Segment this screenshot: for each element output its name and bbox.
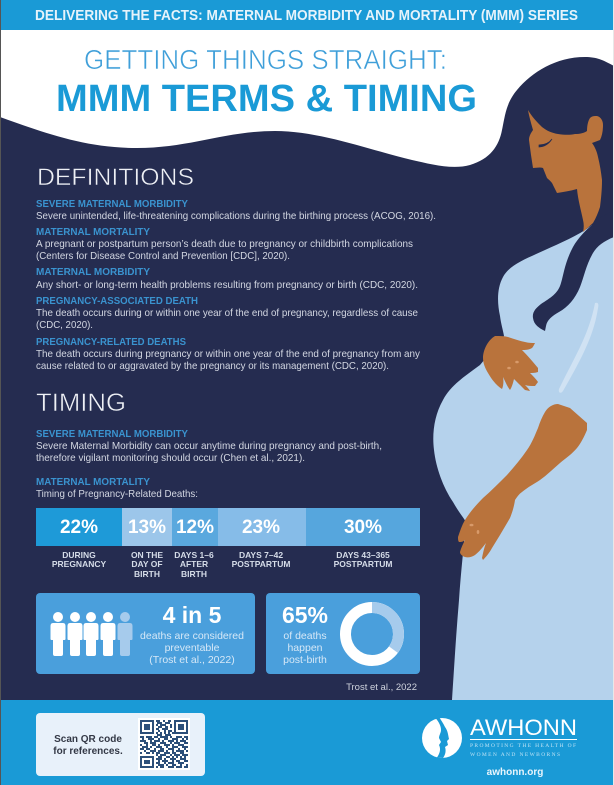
hair strand: [533, 210, 614, 331]
definitions text: Severe unintended, life-threatening complications during the birthing process (ACOG, 2016).: [36, 210, 436, 222]
timing text: therefore vigilant monitoring should occur (Chen et al., 2021).: [36, 452, 305, 464]
timeline bar chart: 23%: [242, 517, 280, 538]
finger highlights: [470, 361, 519, 534]
heading: definitions: DEFINITIONS: [37, 164, 194, 191]
panel: 4 in 5 preventable: [36, 593, 255, 674]
AWHONN logo: WOMEN AND NEWBORNS: [470, 752, 560, 758]
heading: timing: TIMING: [36, 389, 126, 417]
definitions text: A pregnant or postpartum person’s death due to pregnancy or childbirth complications: [36, 238, 413, 250]
timeline bar chart: 13%: [128, 517, 166, 538]
white top area with wave: [0, 30, 614, 167]
panel: 65% post-birth: happen: [287, 642, 323, 654]
definitions text: MATERNAL MORBIDITY: [36, 266, 150, 278]
definitions text: cause related to or aggravated by the pregnancy or its management (CDC, 2020).: [36, 360, 389, 372]
panel: 4 in 5 preventable: (Trost et al., 2022): [149, 654, 235, 666]
definitions text: [36, 198, 436, 372]
face and neck: [528, 110, 603, 232]
timeline bar chart: BIRTH: [181, 569, 207, 579]
panel: 4 in 5 preventable: 4 in 5: [163, 602, 222, 628]
eye: [539, 139, 552, 147]
definitions text: The death occurs during or within one year of the end of pregnancy, regardless of cause: [36, 307, 418, 319]
timing text: SEVERE MATERNAL MORBIDITY: [36, 428, 188, 440]
timeline bar chart: POSTPARTUM: [334, 559, 392, 569]
definitions text: PREGNANCY-RELATED DEATHS: [36, 336, 186, 348]
timeline bar chart: BIRTH: [134, 569, 160, 579]
timeline bar chart: PREGNANCY: [52, 559, 106, 569]
definitions text: Any short- or long-term health problems resulting from pregnancy or birth (CDC, 2020).: [36, 279, 418, 291]
citation: Trost et al., 2022: [346, 682, 417, 693]
upper hand: [483, 336, 538, 391]
definitions text: PREGNANCY-ASSOCIATED DEATH: [36, 295, 198, 307]
timeline bar chart: AFTER: [180, 559, 208, 569]
donut chart: [346, 608, 398, 660]
definitions text: (Centers for Disease Control and Prevention [CDC], 2020).: [36, 250, 290, 262]
timeline bar chart: [36, 508, 420, 579]
timing text: Timing of Pregnancy-Related Deaths:: [36, 488, 198, 500]
title: GETTING THINGS STRAIGHT:: [84, 44, 447, 75]
icon: logo emblem: [422, 717, 462, 758]
timeline bar chart: POSTPARTUM: [232, 559, 290, 569]
AWHONN logo: awhonn.org: [487, 767, 543, 778]
header band: DELIVERING THE FACTS: MATERNAL MORBIDITY AND MORTALITY (MMM) SERIES: [35, 8, 578, 24]
QR code: [138, 718, 190, 770]
icon: five people: [50, 612, 132, 656]
footer band: [0, 700, 614, 785]
panel: 65% post-birth: post-birth: [283, 654, 327, 666]
AWHONN logo: [422, 715, 577, 778]
timeline bar chart: 30%: [344, 517, 382, 538]
illustration: pregnant woman: [433, 110, 614, 700]
timing text: Severe Maternal Morbidity can occur anytime during pregnancy and post-birth,: [36, 440, 382, 452]
timeline bar chart: 12%: [176, 517, 214, 538]
QR card: Scan QR code: [54, 734, 122, 745]
header band: [0, 0, 614, 30]
AWHONN logo: AWHONN: [470, 715, 577, 740]
panel: 65% post-birth: 65%: [282, 602, 328, 628]
lower arm and hand: [458, 404, 587, 560]
panel: 4 in 5 preventable: preventable: [165, 642, 220, 654]
QR card: [36, 713, 205, 776]
timeline bar chart: DAYS 7–42: [239, 550, 283, 560]
timeline bar chart: DURING: [62, 550, 96, 560]
panel: 65% post-birth: [266, 593, 420, 674]
timing text: MATERNAL MORTALITY: [36, 476, 150, 488]
definitions text: MATERNAL MORTALITY: [36, 226, 150, 238]
panel: 4 in 5 preventable: deaths are considered: [140, 630, 244, 642]
definitions text: SEVERE MATERNAL MORBIDITY: [36, 198, 188, 210]
panel: 65% post-birth: of deaths: [283, 630, 327, 642]
timeline bar chart: DAYS 43–365: [336, 550, 390, 560]
dress: [433, 225, 614, 700]
title: MMM TERMS & TIMING: [56, 78, 477, 120]
QR card: for references.: [53, 746, 123, 757]
title: [56, 44, 477, 120]
timeline bar chart: 22%: [60, 517, 98, 538]
timeline bar chart: DAYS 1–6: [174, 550, 214, 560]
timeline bar chart: DAY OF: [131, 559, 163, 569]
definitions text: The death occurs during pregnancy or within one year of the end of pregnancy from any: [36, 348, 421, 360]
timeline bar chart: ON THE: [131, 550, 163, 560]
timing text: [36, 428, 382, 500]
definitions text: (CDC, 2020).: [36, 319, 93, 331]
sleeve highlight: [559, 303, 598, 393]
AWHONN logo: PROMOTING THE HEALTH OF: [470, 743, 576, 749]
